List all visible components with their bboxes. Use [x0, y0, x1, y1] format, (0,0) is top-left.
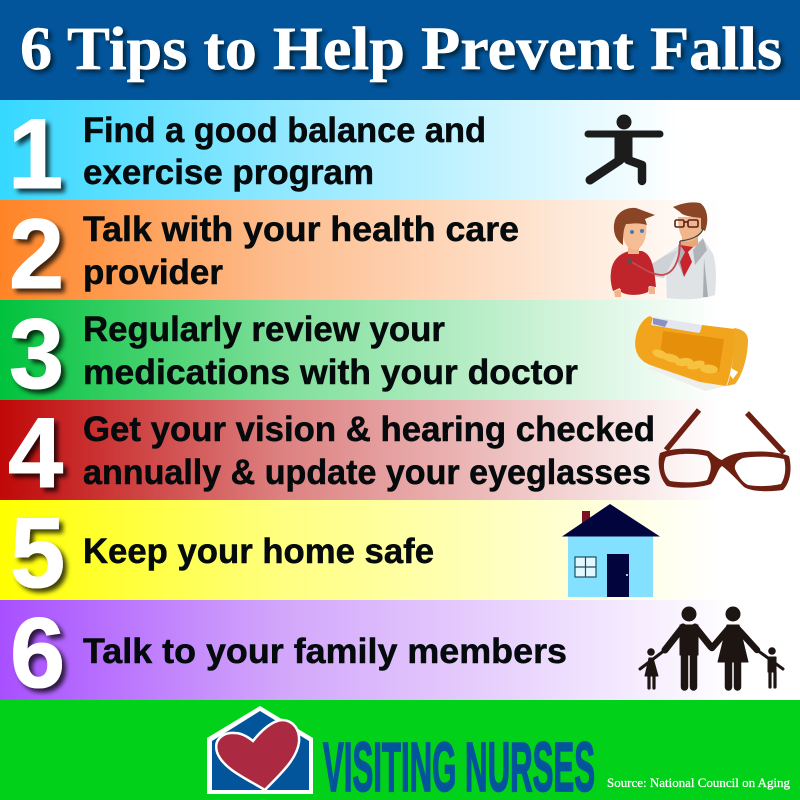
icon: pill bottle [635, 316, 748, 391]
source note: Source: National Council on Aging [607, 775, 790, 790]
title: 6 Tips to Help Prevent Falls [20, 16, 782, 83]
tip 2 text: Talk with your health care [83, 210, 519, 249]
icon: doctor and patient [611, 202, 716, 299]
panel: title banner [0, 0, 800, 100]
tip 6 text: Talk to your family members [83, 632, 567, 671]
icon: yoga figure [588, 114, 660, 181]
tip 3 text: Regularly review your [83, 310, 445, 349]
panel: tip 2 [0, 198, 800, 309]
icon: family silhouette [640, 606, 783, 688]
panel: tip 6 [0, 597, 800, 708]
panel: tip 1 [0, 98, 800, 209]
number 2: 2 [9, 198, 64, 309]
tip 1 text: exercise program [83, 153, 374, 192]
panel: tip 5 [0, 497, 800, 608]
patient [611, 251, 656, 295]
tip 1 text: Find a good balance and [83, 111, 486, 150]
tip 4 text: annually & update your eyeglasses [83, 453, 651, 492]
tip 2 text: provider [83, 253, 223, 292]
number 1: 1 [8, 98, 63, 209]
tip 4 text [83, 410, 655, 492]
panel: footer [0, 700, 800, 800]
tip 2 text [83, 210, 519, 292]
tip 1 text [83, 111, 486, 192]
number 6: 6 [10, 597, 65, 708]
icon: eyeglasses [659, 410, 791, 491]
number 4: 4 [8, 397, 63, 508]
icon: house [562, 504, 660, 597]
panel: tip 3 [0, 298, 800, 409]
number 3: 3 [9, 298, 64, 409]
tip 3 text: medications with your doctor [83, 353, 578, 392]
tip 4 text: Get your vision & hearing checked [83, 410, 655, 449]
panel: tip 4 [0, 397, 800, 508]
doctor coat [664, 240, 716, 299]
doctor sleeve [633, 250, 678, 278]
tip 5 text: Keep your home safe [83, 532, 434, 571]
doctor neck and face [682, 236, 698, 250]
logo: house and heart [207, 706, 313, 794]
stethoscope [630, 241, 680, 275]
number 5: 5 [10, 497, 65, 608]
tip 3 text [83, 310, 578, 392]
